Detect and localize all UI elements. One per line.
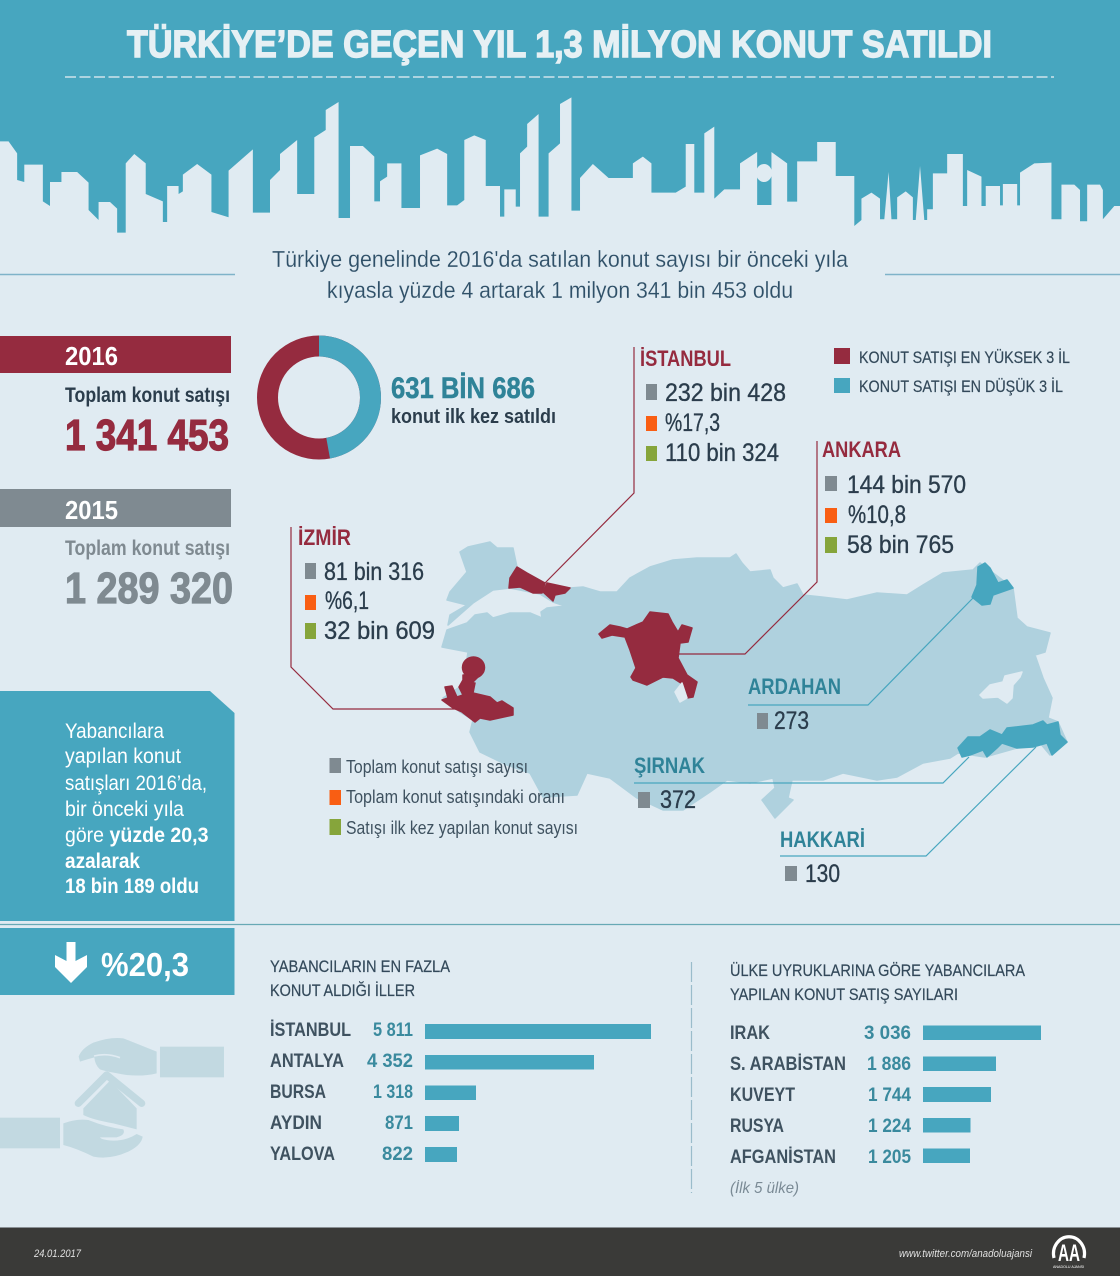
- footer: 24.01.2017: [33, 1248, 82, 1260]
- chart: foreign buyers by nationality: 1 205: [868, 1147, 911, 1168]
- footer: [0, 1227, 1120, 1276]
- provinces: Şırnak and Hakkari: [958, 721, 1067, 757]
- chart: top provinces for foreigners: ANTALYA: [270, 1051, 344, 1072]
- panel: 2015 total: [0, 489, 233, 613]
- heading: YAPILAN KONUT SATIŞ SAYILARI: [730, 986, 958, 1004]
- panel: 2015 total: 2015: [65, 495, 118, 525]
- callout: Ardahan: 273: [774, 707, 809, 735]
- callout: İstanbul: İSTANBUL: [640, 346, 731, 371]
- logo: Anadolu Ajansı: AA: [1058, 1240, 1080, 1267]
- chart: top provinces for foreigners: BURSA: [270, 1082, 326, 1103]
- lake: Van: [980, 672, 1022, 703]
- province: Ankara: [599, 612, 697, 698]
- donut caption: 631 BİN 686: [391, 372, 535, 405]
- header band with skyline: [0, 0, 1120, 310]
- callout: Ankara: [679, 437, 966, 654]
- callout: Ankara: ANKARA: [822, 437, 901, 462]
- callout: Ankara: 58 bin 765: [847, 531, 954, 559]
- chart: foreign buyers by nationality: 3 036: [864, 1023, 911, 1044]
- chart: top provinces for foreigners: 4 352: [367, 1051, 413, 1072]
- icon: down arrow: [55, 942, 87, 983]
- heading: [270, 958, 450, 1000]
- province: Ardahan: [972, 563, 1013, 605]
- logo: Anadolu Ajansı: [1053, 1237, 1085, 1269]
- callout: İstanbul: 232 bin 428: [665, 379, 786, 407]
- chart: foreign buyers by nationality: RUSYA: [730, 1116, 784, 1137]
- callout: Ardahan: [748, 598, 973, 735]
- chart: foreign buyers by nationality: S. ARABİSTAN: [730, 1054, 846, 1075]
- callout: Ankara: %10,8: [848, 501, 906, 529]
- lake: Tuz: [675, 683, 687, 702]
- chart: foreign buyers by nationality: IRAK: [730, 1023, 770, 1044]
- callout: İzmir: %6,1: [325, 587, 369, 615]
- map legend: metrics: Satışı ilk kez yapılan konut sayısı: [346, 818, 578, 838]
- callout: Ankara: 144 bin 570: [847, 471, 966, 499]
- callout: Şırnak: ŞIRNAK: [634, 753, 705, 778]
- callout: İstanbul: [545, 346, 786, 583]
- panel: foreign sales text: yapılan konut: [65, 745, 181, 768]
- map of Turkey: [442, 542, 1067, 818]
- intro text: Türkiye genelinde 2016'da satılan konut sayısı bir önceki yıla: [272, 246, 848, 272]
- map legend: metrics: Toplam konut satışındaki oranı: [346, 787, 565, 807]
- map legend: metrics: Toplam konut satışı sayısı: [346, 757, 528, 777]
- chart: top provinces for foreigners: 822: [382, 1144, 413, 1165]
- panel: 2015 total: 1 289 320: [65, 564, 233, 613]
- donut chart: [268, 346, 370, 449]
- note: (İlk 5 ülke): [730, 1178, 799, 1197]
- chart: top provinces for foreigners: 871: [385, 1113, 413, 1134]
- heading: ÜLKE UYRUKLARINA GÖRE YABANCILARA: [730, 962, 1025, 980]
- heading: [730, 962, 1025, 1004]
- callout: İstanbul: 110 bin 324: [665, 439, 779, 467]
- intro text: [272, 246, 848, 303]
- callout: Şırnak: [634, 753, 969, 814]
- icon: hands protecting house: [0, 1038, 224, 1158]
- panel: decrease: [0, 928, 234, 995]
- callout: İzmir: [291, 525, 460, 709]
- panel: decrease: %20,3: [101, 946, 189, 983]
- panel: foreign sales text: Yabancılara: [65, 720, 164, 743]
- panel: foreign sales text: 18 bin 189 oldu: [65, 875, 199, 898]
- chart: top provinces for foreigners: İSTANBUL: [270, 1020, 351, 1041]
- donut caption: [391, 372, 556, 428]
- panel: foreign sales text: yüzde 20,3: [110, 824, 208, 847]
- chart: top provinces for foreigners: YALOVA: [270, 1144, 335, 1165]
- chart: top provinces for foreigners: 5 811: [373, 1020, 413, 1041]
- callout: Şırnak: 372: [660, 786, 696, 814]
- panel: 2016 total: 1 341 453: [65, 411, 229, 460]
- logo: Anadolu Ajansı: ANADOLU AJANSI: [1053, 1264, 1084, 1269]
- map legend: metrics: [330, 757, 578, 838]
- callout: İzmir: 32 bin 609: [324, 617, 435, 645]
- map legend: highest and lowest: [834, 348, 1070, 396]
- chart: foreign buyers by nationality: [730, 962, 1041, 1197]
- chart: foreign buyers by nationality: AFGANİSTAN: [730, 1147, 836, 1168]
- callout: İzmir: İZMİR: [298, 525, 351, 550]
- province: İzmir: [442, 657, 513, 722]
- callout: İzmir: 81 bin 316: [324, 558, 424, 586]
- panel: foreign sales text: göre: [65, 824, 104, 847]
- callout: Ardahan: ARDAHAN: [748, 674, 841, 699]
- panel: 2015 total: Toplam konut satışı: [65, 537, 230, 560]
- chart: foreign buyers by nationality: 1 744: [868, 1085, 911, 1106]
- panel: foreign sales text: bir önceki yıla: [65, 798, 184, 821]
- heading: YABANCILARIN EN FAZLA: [270, 958, 450, 976]
- panel: 2016 total: [0, 336, 231, 460]
- panel: 2016 total: 2016: [65, 341, 118, 371]
- callout: Hakkari: HAKKARİ: [780, 827, 865, 852]
- chart: top provinces for foreigners: AYDIN: [270, 1113, 322, 1134]
- chart: foreign buyers by nationality: 1 224: [868, 1116, 911, 1137]
- intro text: kıyasla yüzde 4 artarak 1 milyon 341 bin 453 oldu: [327, 277, 793, 303]
- chart: foreign buyers by nationality: 1 886: [867, 1054, 911, 1075]
- callout: Hakkari: 130: [805, 860, 840, 888]
- panel: 2016 total: Toplam konut satışı: [65, 384, 230, 407]
- footer: www.twitter.com/anadoluajansi: [899, 1248, 1032, 1260]
- title: TÜRKİYE’DE GEÇEN YIL 1,3 MİLYON KONUT SATILDI: [127, 23, 992, 66]
- chart: top provinces for foreigners: [270, 958, 651, 1165]
- map legend: highest and lowest: KONUT SATIŞI EN YÜKSEK 3 İL: [859, 348, 1070, 367]
- panel: foreign sales text: satışları 2016’da,: [65, 772, 207, 795]
- panel: foreign sales text: azalarak: [65, 850, 140, 873]
- chart: foreign buyers by nationality: KUVEYT: [730, 1085, 795, 1106]
- donut caption: konut ilk kez satıldı: [391, 406, 556, 428]
- callout: İstanbul: %17,3: [665, 409, 720, 437]
- chart: top provinces for foreigners: 1 318: [373, 1082, 413, 1103]
- map legend: highest and lowest: KONUT SATIŞI EN DÜŞÜK 3 İL: [859, 377, 1063, 396]
- province: İstanbul: [509, 567, 570, 601]
- panel: foreign sales text: [0, 691, 234, 921]
- heading: KONUT ALDIĞI İLLER: [270, 981, 415, 1000]
- callout: Hakkari: [780, 747, 1036, 888]
